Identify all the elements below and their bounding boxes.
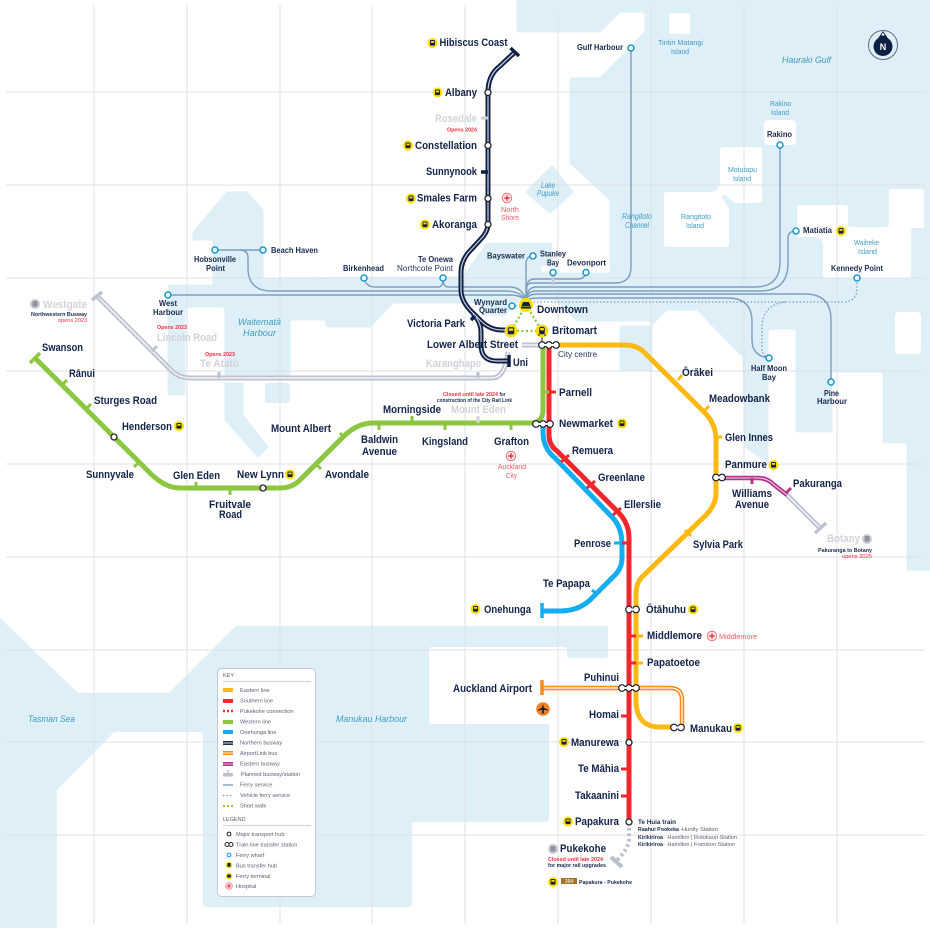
legend: Bus transfer hub (226, 862, 277, 870)
station: Meadowbank: Meadowbank (709, 393, 771, 405)
ferry label: Te Onewa Northcote Point (397, 255, 454, 273)
station: Akoranga: Akoranga (432, 219, 478, 231)
station: Rosedale: Rosedale (435, 113, 477, 125)
hospital: North Shore: North (501, 205, 519, 214)
transfer hub: Britomart city centre (538, 341, 560, 349)
station: Orakei: Ōrākei (682, 367, 713, 379)
Pukekohe connection (611, 828, 629, 867)
station: Westgate (30, 299, 88, 324)
water: harbour inlet (225, 383, 268, 457)
note: Te Huia train: Te Huia train (638, 819, 676, 826)
bus route 394 Papakura to Pukekohe: 394 (565, 879, 573, 885)
note: Te Huia train: Kirikiriroa (638, 835, 664, 841)
key: Southern line (223, 698, 273, 704)
legend: Bus transfer hub: Bus transfer hub (236, 864, 277, 870)
station: Fruitvale Road: Road (219, 509, 242, 521)
ferry label: Devonport: Devonport (567, 259, 606, 268)
Britomart train hub icon (536, 324, 548, 338)
station: Greenlane: Greenlane (598, 472, 645, 484)
island labels: Tiritiri Matangi (658, 38, 703, 47)
station: Uni: Uni (513, 357, 528, 369)
legend: Ferry wharf: Ferry wharf (236, 853, 265, 859)
water labels: Rangitoto (622, 212, 652, 221)
ferry label: Pine Harbour: Harbour (817, 397, 847, 406)
station: Smales Farm: Smales Farm (417, 193, 477, 205)
station: Mount Albert: Mount Albert (271, 423, 331, 435)
station: Puhinui: Puhinui (584, 672, 619, 684)
key: Ferry service (223, 782, 272, 788)
compass: north: N (880, 42, 886, 52)
station: Lincoln Road (157, 325, 217, 344)
station: Westgate: Northwestern Busway (31, 312, 88, 318)
transfer hub: Newmarket (532, 420, 554, 428)
ferry label: Stanley Bay: Stanley (540, 250, 566, 259)
note: Te Huia train: · Hamilton | Frankton Station (664, 842, 735, 848)
key: Eastern busway (223, 762, 280, 768)
station: Grafton: Grafton (494, 436, 529, 448)
legend: Ferry terminal: Ferry terminal (236, 874, 270, 880)
planned Botany busway (785, 493, 826, 533)
Downtown ferry terminal icon (519, 298, 533, 312)
station: Pakuranga: Pakuranga (793, 478, 843, 490)
station: Botany (818, 533, 873, 560)
legend: Major transport hub: Major transport hub (236, 832, 285, 838)
station: Ellerslie: Ellerslie (624, 499, 661, 511)
water labels: Waitematā (238, 317, 281, 327)
station: Rosedale: Opens 2024 (447, 128, 478, 134)
legend: Hospital (226, 883, 256, 890)
station: Hibiscus Coast: Hibiscus Coast (440, 37, 508, 49)
station: Fruitvale Road (209, 499, 251, 521)
key: Pukekohe connection: Pukekohe connection (240, 709, 294, 715)
key: AirportLink bus (223, 751, 278, 757)
bus route 394 Papakura to Pukekohe (548, 877, 632, 887)
Western line (30, 345, 549, 495)
key: Vehicle ferry service: Vehicle ferry service (240, 793, 290, 799)
ferry routes (168, 48, 831, 382)
vehicle ferry dotted routes (512, 278, 857, 358)
station: Papatoetoe: Papatoetoe (647, 657, 700, 669)
ferry label: Half Moon Bay: Half Moon (751, 364, 787, 373)
station: Panmure: Panmure (725, 459, 767, 471)
key: Short walk (223, 804, 266, 810)
station: Lower Albert Street: Lower Albert Street (427, 339, 518, 351)
note: Te Huia train: Kirikiriroa (638, 842, 664, 848)
ferry label: Pine Harbour (817, 389, 847, 406)
legend heading: LEGEND (223, 817, 246, 823)
ferry label: Wynyard Quarter: Wynyard (474, 298, 507, 307)
ferry label: Rakino: Rakino (767, 130, 792, 139)
closure note: Mount Eden: for (500, 392, 506, 398)
Eastern line (555, 345, 722, 727)
station: Botany: Botany (827, 533, 861, 545)
station: Newmarket: Newmarket (559, 418, 613, 430)
ferry label: West Harbour: West (159, 299, 177, 308)
key: Southern line: Southern line (240, 698, 273, 704)
key: Western line (223, 720, 271, 726)
station: Lincoln Road: Lincoln Road (157, 332, 217, 344)
Southern line (549, 345, 636, 822)
water: harbour small bay (265, 383, 290, 403)
station: Manurewa: Manurewa (571, 737, 620, 749)
station: Williams Avenue: Avenue (735, 499, 769, 511)
ferry label: Half Moon Bay (751, 364, 787, 382)
station: Homai: Homai (589, 709, 619, 721)
key: Short walk: Short walk (240, 804, 266, 810)
station: Glen Eden: Glen Eden (173, 470, 220, 482)
transfer hub: Manukau (670, 724, 685, 731)
Stanley Bay stub (552, 273, 554, 285)
ferry label: Matiatia: Matiatia (803, 226, 833, 235)
transfer hub: Panmure (712, 474, 726, 481)
station: Te Atatu: Te Atatū (200, 358, 239, 370)
ferry label: Hobsonville Point (194, 255, 237, 273)
island labels: Island (771, 108, 789, 117)
hospital: Middlemore (707, 631, 757, 641)
major hubs (111, 90, 632, 825)
water labels: Tasman Sea (28, 714, 75, 725)
note: Te Huia train: -Huntly Station (680, 827, 718, 833)
ferry label: Birkenhead: Birkenhead (343, 264, 384, 273)
station: Morningside: Morningside (383, 404, 441, 416)
closure note: Mount Eden: Closed until late 2024 (443, 392, 499, 398)
ferry label: Half Moon Bay: Bay (762, 373, 777, 382)
station: Pukekohe: for major rail upgrades (548, 863, 606, 869)
short walk links (511, 305, 542, 331)
water labels (28, 55, 832, 725)
icon: airport plane (536, 702, 550, 716)
station: Onehunga: Onehunga (484, 604, 532, 616)
water labels: Manukau Harbour (336, 714, 408, 725)
station: Westgate: Westgate (43, 299, 87, 311)
key: Planned busway/station: Planned busway/station (241, 772, 300, 778)
station: Pukekohe (548, 843, 606, 869)
water labels: Harbour (243, 328, 277, 338)
station: Pukekohe: Closed until late 2024 (548, 857, 604, 863)
station: Baldwin Avenue (361, 434, 398, 458)
hospital: Auckland City: Auckland (498, 462, 526, 471)
Victoria Park bus hub icon (504, 324, 518, 338)
label: City centre: City centre (558, 350, 598, 359)
ferry label: Hobsonville Point: Point (206, 264, 225, 273)
hospital: Auckland City: City (506, 471, 517, 480)
planned north-western busway (92, 292, 540, 378)
station: Sunnynook: Sunnynook (426, 166, 478, 178)
station: Karanghape: Karanghape (426, 358, 481, 370)
panel: key and legend (218, 668, 316, 896)
ferry label: Wynyard Quarter (474, 298, 507, 315)
ferry label: Wynyard Quarter: Quarter (479, 306, 507, 315)
Britomart connector (541, 337, 543, 342)
station: Westgate: opens 2023 (58, 318, 87, 324)
ferry label: Hobsonville Point: Hobsonville (194, 255, 237, 264)
key: Eastern line (223, 688, 270, 694)
station: Botany: opens 2025 (842, 554, 872, 560)
station: Britomart: Britomart (552, 325, 597, 337)
hospital: Middlemore: Middlemore (719, 632, 757, 641)
key: Ferry service: Ferry service (240, 782, 272, 788)
station: Ranui: Rānui (69, 368, 95, 380)
key: Onehunga line (223, 730, 276, 736)
key: Onehunga line: Onehunga line (240, 730, 276, 736)
key: AirportLink bus: AirportLink bus (240, 751, 278, 757)
station: Henderson: Henderson (122, 421, 172, 433)
water: Lake Pupuke (527, 167, 572, 212)
island labels: Island (671, 47, 689, 56)
station: Rosedale (435, 113, 478, 134)
water labels: Lake (541, 181, 555, 190)
station: Penrose: Penrose (574, 538, 611, 550)
ferry label: Te Onewa Northcote Point: Northcote Point (397, 264, 454, 273)
station: Avondale: Avondale (325, 469, 369, 481)
station: Baldwin Avenue: Avenue (362, 446, 397, 458)
key: Planned busway/station (223, 770, 300, 778)
island: Motutapu and Rangitoto (664, 147, 762, 247)
island: Tiritiri Matangi (669, 13, 690, 34)
station: Victoria Park: Victoria Park (407, 318, 466, 330)
station: Glen Innes: Glen Innes (725, 432, 773, 444)
island labels: Rangitoto (681, 212, 711, 221)
station: Kingsland: Kingsland (422, 436, 468, 448)
island: east small (895, 312, 921, 354)
island labels: Rakino (770, 99, 791, 108)
station: Downtown: Downtown (537, 304, 588, 316)
legend: Ferry terminal (226, 873, 270, 880)
station: Pukekohe: Pukekohe (560, 843, 606, 855)
ferry label: Pine Harbour: Pine (824, 389, 839, 398)
station: Botany: Pakuranga to Botany (818, 548, 873, 554)
station: Williams Avenue (732, 488, 772, 511)
Northern busway (461, 48, 519, 367)
island labels (658, 38, 879, 256)
station: New Lynn: New Lynn (237, 469, 284, 481)
ferry label: West Harbour (153, 299, 183, 317)
key: Western line: Western line (240, 720, 271, 726)
bus route 394 Papakura to Pukekohe: Papakura - Pukekohe (579, 880, 632, 886)
ferry label: Gulf Harbour: Gulf Harbour (577, 43, 623, 52)
ferry label: Bayswater: Bayswater (487, 252, 525, 261)
station: Te Atatu: Opens 2023 (205, 352, 235, 358)
island labels: Waiheke (854, 238, 879, 247)
key: Eastern line: Eastern line (240, 688, 270, 694)
Eastern busway (722, 478, 791, 495)
station: Sturges Road: Sturges Road (94, 395, 157, 407)
key: Northern busway: Northern busway (240, 740, 282, 746)
ferry label: Stanley Bay: Bay (547, 259, 559, 268)
station: Williams Avenue: Williams (732, 488, 772, 500)
ferry label: Matiatia (803, 226, 846, 236)
ferry label: Te Onewa Northcote Point: Te Onewa (418, 255, 454, 264)
water: Tasman Sea and Manukau Harbour (0, 618, 608, 928)
hospital: Auckland City (498, 451, 526, 480)
station: Te Atatu (200, 352, 239, 370)
key: Eastern busway: Eastern busway (240, 762, 280, 768)
station: Auckland Airport: Auckland Airport (453, 683, 532, 695)
hospital: North Shore: Shore (501, 213, 519, 222)
station: Parnell: Parnell (559, 387, 592, 399)
station: Constellation: Constellation (415, 140, 477, 152)
AirportLink bus (542, 680, 682, 727)
closure note: Mount Eden: construction of the City Rail Link (437, 398, 513, 404)
station: Lincoln Road: Opens 2023 (157, 325, 187, 331)
water: Waitemata Harbour and Hauraki Gulf (168, 0, 930, 570)
legend: Train line transfer station: Train line transfer station (236, 842, 297, 848)
island: Waiheke (797, 189, 924, 278)
station: Albany (432, 87, 478, 99)
station: Sylvia Park: Sylvia Park (693, 539, 744, 551)
station: Fruitvale Road: Fruitvale (209, 499, 251, 511)
station: Papakura: Papakura (575, 816, 620, 828)
water labels: Pupuke (537, 189, 559, 198)
station: Sunnyvale: Sunnyvale (86, 469, 134, 481)
station: Te Papapa: Te Papapa (543, 578, 591, 590)
island labels: Island (733, 174, 751, 183)
station: Otahuhu: Ōtāhuhu (646, 604, 686, 616)
station: Mount Eden: Mount Eden (451, 404, 506, 416)
legend: Hospital: Hospital (236, 884, 256, 890)
island labels: Motutapu (728, 165, 757, 174)
water labels: Channel (625, 221, 649, 230)
key heading: KEY (223, 673, 234, 679)
note: Te Huia train: · Hamilton | Rotokauri Station (664, 835, 737, 841)
transfer hub: Puhinui (618, 684, 640, 692)
island labels: Island (686, 221, 704, 230)
station: Albany: Albany (445, 87, 478, 99)
ferry label: Stanley Bay (540, 250, 566, 268)
station: Takaanini: Takaanini (575, 790, 619, 802)
ferry label: Kennedy Point: Kennedy Point (831, 264, 883, 273)
station: Baldwin Avenue: Baldwin (361, 434, 398, 446)
note: Te Huia train (638, 819, 737, 848)
ferry wharves (165, 45, 860, 385)
ferry label: Beach Haven: Beach Haven (271, 246, 318, 255)
note: Te Huia train: Raahui Pookeka (638, 827, 680, 833)
hospital: North Shore (501, 193, 519, 222)
station: Manukau: Manukau (690, 723, 732, 735)
island: Rakino (764, 120, 796, 145)
island labels: Island (858, 247, 877, 256)
station: Te Mahia: Te Māhia (578, 763, 620, 775)
station: Remuera: Remuera (572, 445, 614, 457)
station: Swanson: Swanson (42, 342, 83, 354)
ferry label: West Harbour: Harbour (153, 308, 183, 317)
water labels: Hauraki Gulf (782, 55, 832, 66)
station: Middlemore: Middlemore (647, 630, 702, 642)
transfer hub: Otahuhu (625, 606, 640, 613)
Onehunga line (541, 424, 622, 618)
closure note: Mount Eden (437, 392, 513, 404)
compass: north (868, 30, 898, 60)
